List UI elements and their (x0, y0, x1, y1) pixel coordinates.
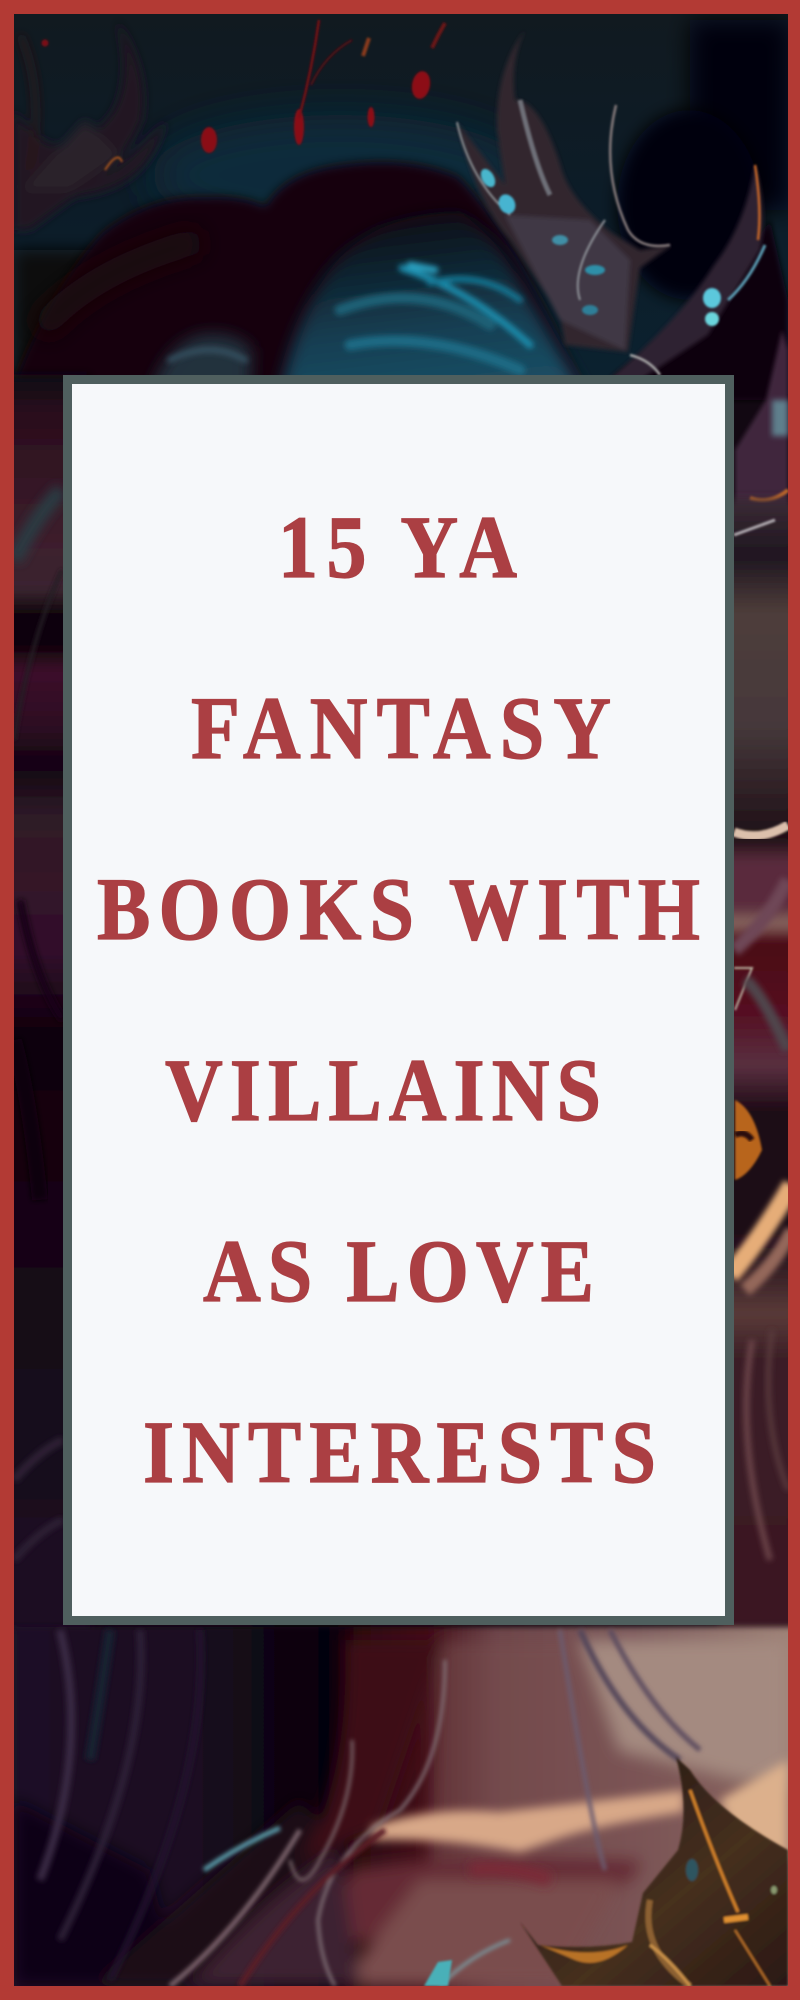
title: 15 YA Fantasy Books With Villains As Love Interests: 15 YA (278, 499, 517, 597)
title: 15 YA Fantasy Books With Villains As Love Interests: VILLAINS (165, 1042, 601, 1140)
bottom-right golden crown (520, 1757, 788, 1986)
teal accent at lower centre (424, 1960, 452, 1986)
top background: dark teal wall (14, 14, 790, 400)
top hair mound (14, 162, 590, 395)
top-right crown (457, 30, 788, 520)
top-left crown fragments (14, 20, 166, 230)
title: 15 YA Fantasy Books With Villains As Love Interests: AS LOVE (203, 1223, 594, 1321)
left strip: face in shadow (0, 375, 90, 1635)
bottom section: hair and skin (0, 1627, 800, 2000)
title: 15 YA Fantasy Books With Villains As Love Interests: BOOKS WITH (97, 861, 700, 959)
blood red drops and branch (42, 20, 445, 153)
right strip: hair and jewellery (720, 500, 800, 1630)
title: 15 YA Fantasy Books With Villains As Love Interests: FANTASY (191, 680, 611, 778)
title panel (63, 375, 734, 1625)
title: 15 YA Fantasy Books With Villains As Love Interests: INTERESTS (143, 1404, 656, 1502)
